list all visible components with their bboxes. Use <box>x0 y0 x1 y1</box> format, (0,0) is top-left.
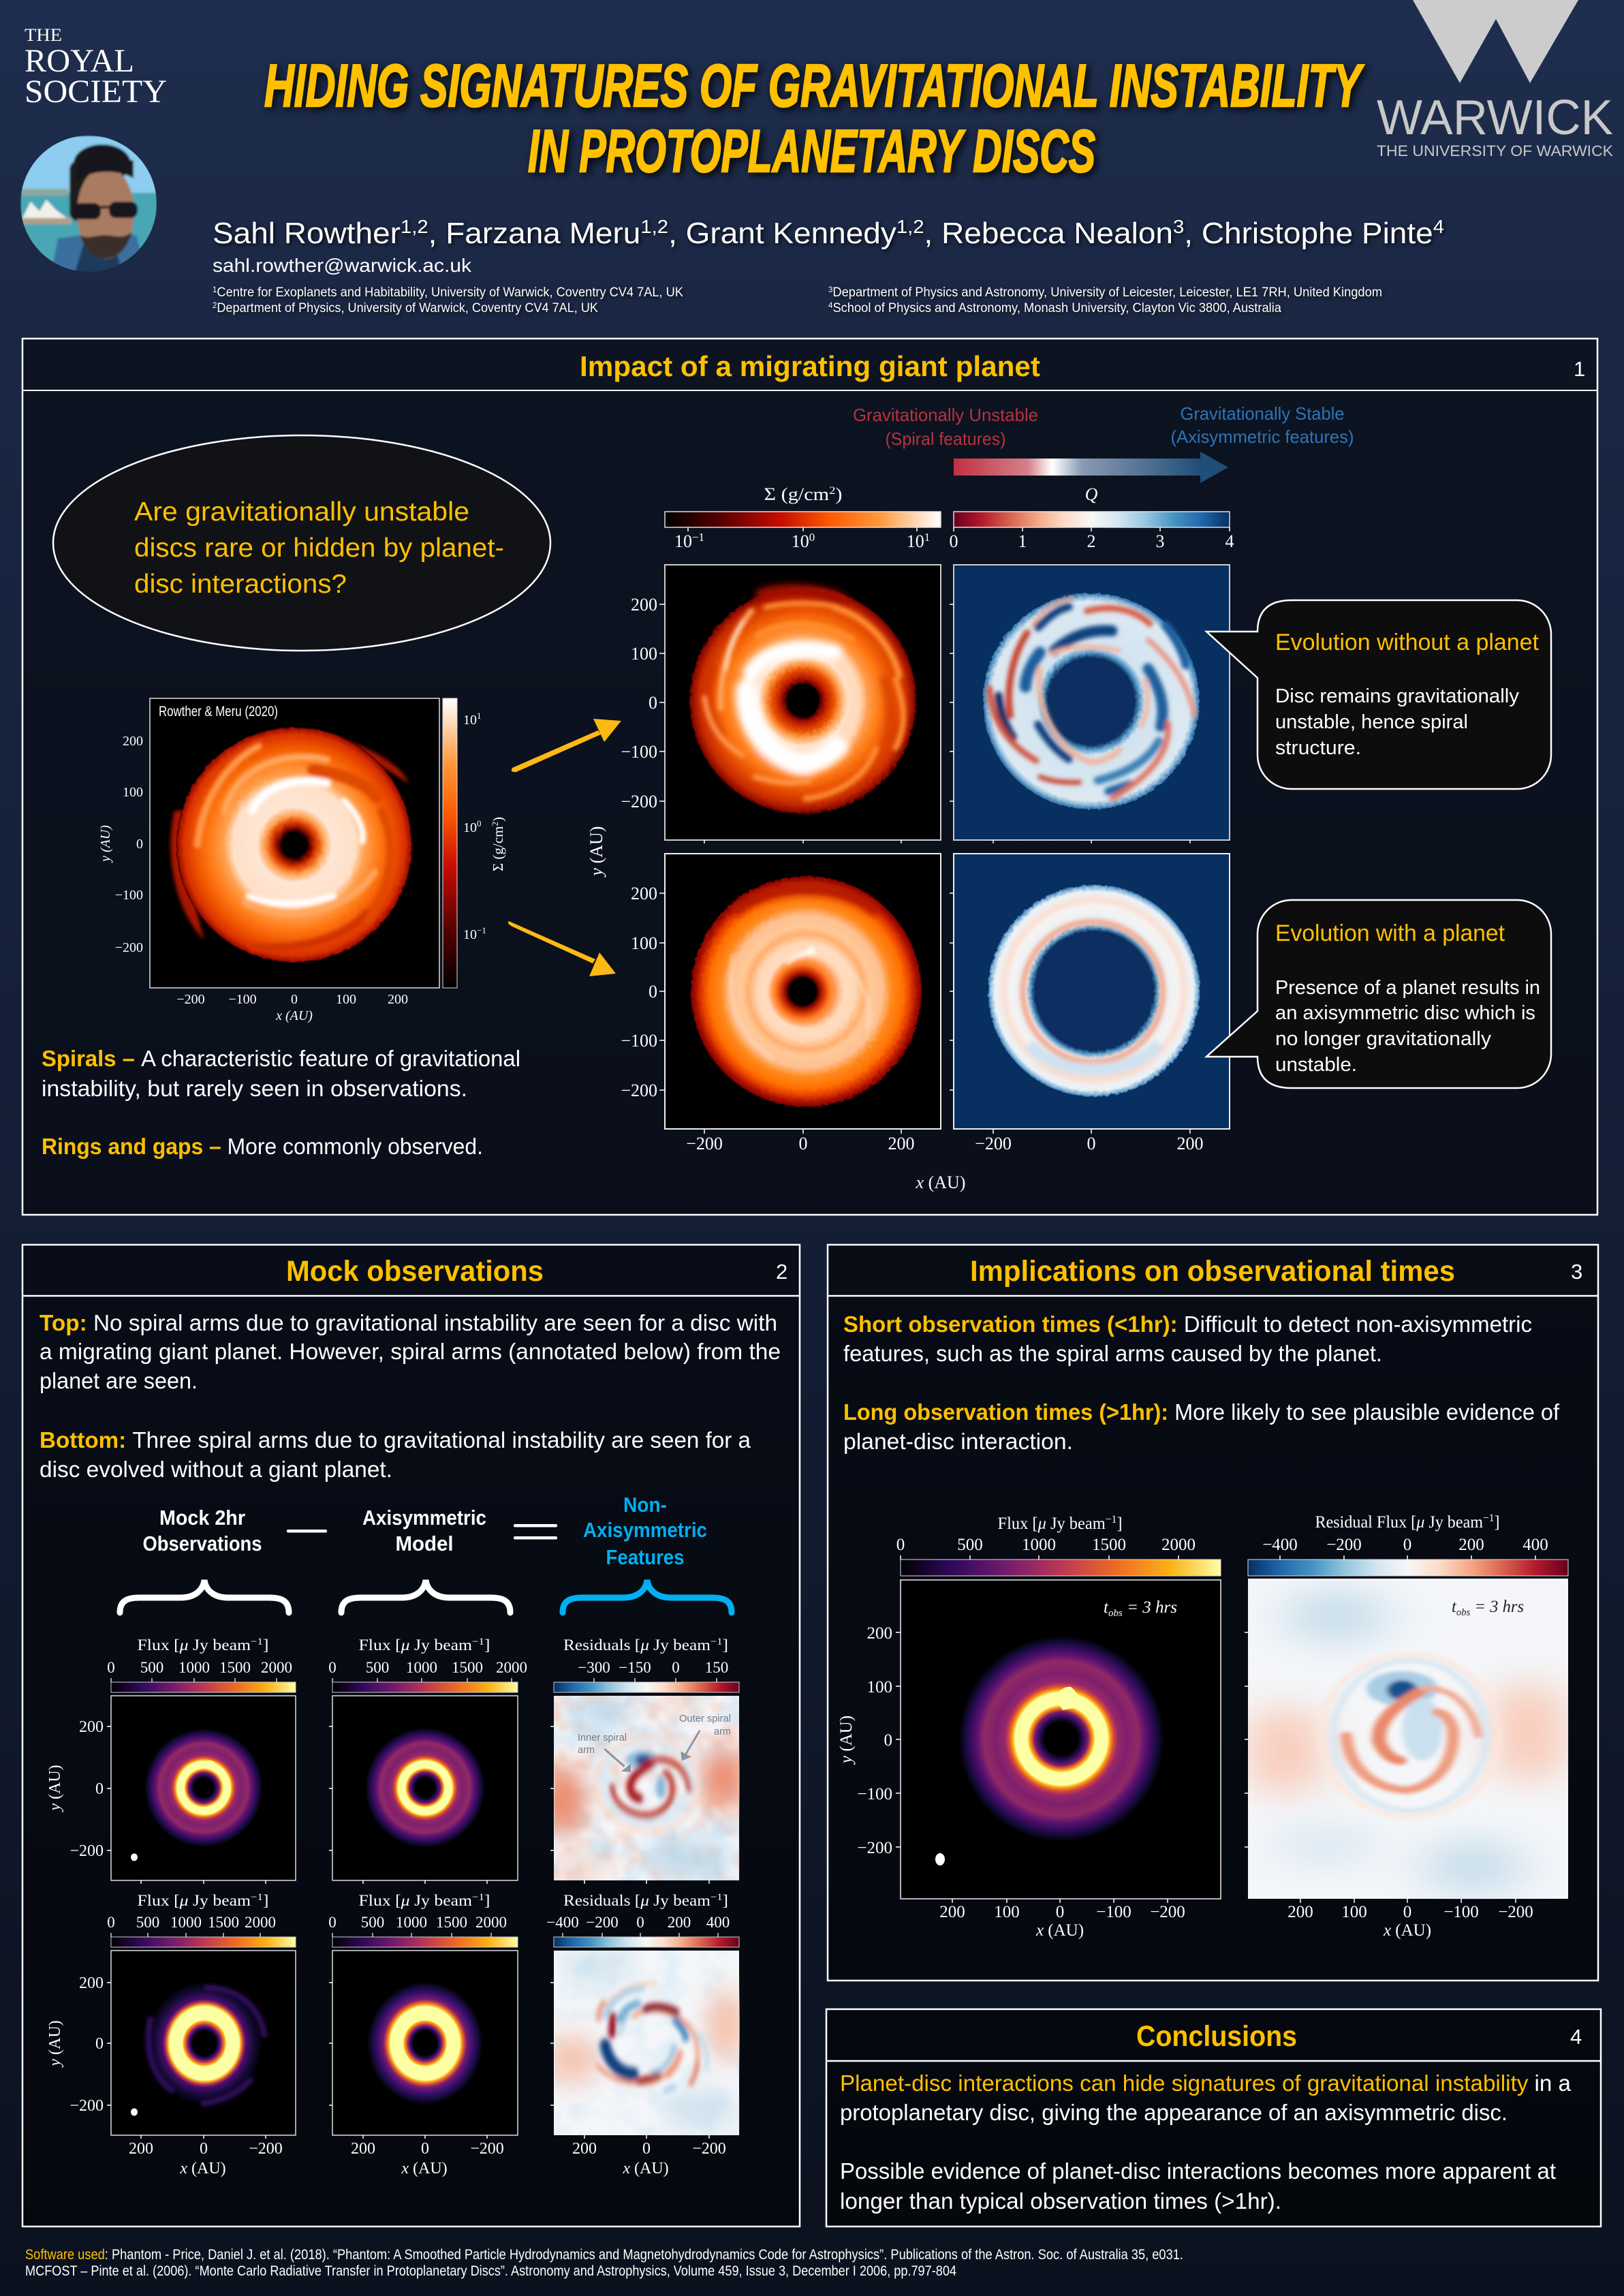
affiliations <box>213 285 1382 315</box>
plot titles and colorbars row 2: 1500 <box>208 1914 239 1931</box>
heading: panel 3: Implications on observational times <box>970 1255 1455 1288</box>
affiliations: 1 <box>213 285 217 294</box>
axis ticks and labels for density and Q maps: −200 <box>621 1081 657 1100</box>
axis ticks and labels for density and Q maps: 200 <box>1177 1134 1203 1153</box>
plot titles and colorbars row 1: 1000 <box>406 1659 437 1676</box>
title: IN PROTOPLANETARY DISCS <box>528 117 1095 185</box>
chart: flux at three hours: t <box>1104 1598 1108 1617</box>
axis ticks and labels for three hour plots: 0 <box>884 1731 892 1750</box>
gradient arrow legend: unstable to stable: Gravitationally Stable <box>1180 403 1345 424</box>
plot titles and colorbars row 2: 500 <box>361 1914 384 1931</box>
plot titles and colorbars row 1: −300 <box>578 1659 610 1676</box>
authors: , Rebecca Nealon <box>924 217 1173 250</box>
plot titles and colorbars row 1: ] <box>723 1636 728 1654</box>
colorbar: Q: 1 <box>1018 531 1027 551</box>
axis labels: 100 <box>123 785 143 800</box>
chart: flux at three hours: ] <box>1116 1515 1123 1533</box>
plot titles and colorbars row 1: −1 <box>251 1636 263 1647</box>
axis ticks and labels for density and Q maps: 100 <box>631 644 657 664</box>
text block: spirals and rings: Rings and gaps – More commonly observed. <box>42 1134 483 1159</box>
plot titles and colorbars row 1 <box>107 1636 739 1692</box>
colorbar: sigma: −1 <box>692 531 704 544</box>
colorbar: surface density: 10 <box>463 927 477 942</box>
colorbar: Q <box>950 484 1234 551</box>
axis ticks and labels for density and Q maps: −200 <box>621 792 657 811</box>
axis ticks and labels for mock observation grid: −200 <box>470 2140 504 2158</box>
colorbar: sigma: 0 <box>809 531 815 544</box>
gradient arrow legend: unstable to stable: (Spiral features) <box>886 429 1005 449</box>
plot titles and colorbars row 2: Residuals [ μ Jy beam <box>563 1892 705 1909</box>
heading: panel 1: Impact of a migrating giant planet <box>580 350 1040 382</box>
chart: flux at three hours: 2000 <box>1161 1536 1196 1554</box>
axis ticks and labels for density and Q maps: 200 <box>631 884 657 903</box>
plot titles and colorbars row 2: −200 <box>586 1914 619 1931</box>
text block: spirals and rings: Spirals – A characteristic feature of gravitational <box>42 1046 520 1071</box>
authors <box>213 216 1444 250</box>
text block: conclusions: longer than typical observation times (>1hr). <box>840 2188 1281 2214</box>
equation header: observations minus model equals features: Non- <box>623 1493 667 1517</box>
authors: Sahl Rowther <box>213 217 392 250</box>
panel number 2: 2 <box>776 1260 787 1284</box>
plot titles and colorbars row 2: ] <box>723 1892 728 1909</box>
chart: Rowther and Meru surface density map <box>98 698 506 1023</box>
axis ticks and labels for three hour plots: x (AU) <box>1383 1921 1431 1940</box>
axis labels: x (AU) <box>275 1008 313 1023</box>
text block: top and bottom explanation: a migrating giant planet. However, spiral arms (annotated below) from the <box>40 1339 781 1364</box>
authors: 1,2 <box>401 216 428 237</box>
axis ticks and labels for density and Q maps: −200 <box>975 1134 1012 1153</box>
plot titles and colorbars row 2 <box>107 1892 739 1947</box>
colorbar: surface density: −1 <box>477 925 486 935</box>
axis ticks and labels for density and Q maps: 0 <box>798 1134 808 1153</box>
axis ticks and labels for density and Q maps <box>587 595 1203 1192</box>
chart: flux at three hours: 0 <box>896 1536 905 1554</box>
arrow: inner spiral arm <box>604 1749 631 1772</box>
chart: flux at three hours <box>896 1514 1221 1899</box>
axis ticks and labels for mock observation grid: −200 <box>69 1842 104 1860</box>
affiliations: Centre for Exoplanets and Habitability, University of Warwick, Coventry CV4 7AL, UK <box>217 285 683 300</box>
text block: top and bottom explanation <box>40 1310 781 1482</box>
plot titles and colorbars row 1: 0 <box>672 1659 680 1676</box>
plot titles and colorbars row 2: 500 <box>136 1914 159 1931</box>
plot titles and colorbars row 2: 2000 <box>475 1914 507 1931</box>
authors: 3 <box>1173 216 1184 237</box>
plot titles and colorbars row 2: 1500 <box>436 1914 467 1931</box>
colorbar: surface density <box>443 698 506 988</box>
axis ticks and labels for mock observation grid: 200 <box>351 2140 375 2158</box>
chart: flux at three hours: = 3 hrs <box>1123 1598 1177 1617</box>
logo: University of Warwick: WARWICK <box>1377 91 1613 145</box>
axis labels: −100 <box>228 992 257 1007</box>
text block: observation times: Short observation times (<1hr): Difficult to detect non-axisymmetric <box>843 1312 1532 1337</box>
axis ticks and labels for three hour plots: x (AU) <box>1035 1921 1084 1940</box>
equation header: observations minus model equals features <box>143 1493 707 1569</box>
callout: evolution without a planet: Evolution without a planet <box>1275 630 1540 655</box>
axis ticks and labels for density and Q maps: −200 <box>686 1134 723 1153</box>
axis labels: 100 <box>336 992 356 1007</box>
axis ticks and labels for mock observation grid: −200 <box>69 2097 104 2115</box>
axis ticks and labels for mock observation grid: 0 <box>95 2035 104 2053</box>
callout: research question ellipse: discs rare or hidden by planet- <box>134 533 504 563</box>
chart: residual flux at three hours: −400 <box>1262 1536 1298 1554</box>
colorbar: surface density: 10 <box>463 820 477 835</box>
affiliations: School of Physics and Astronomy, Monash University, Clayton Vic 3800, Australia <box>832 301 1281 315</box>
logo: The Royal Society: ROYAL <box>25 43 134 79</box>
equation header: observations minus model equals features: Model <box>395 1532 454 1555</box>
plot titles and colorbars row 1: Residuals [ μ Jy beam <box>563 1636 705 1654</box>
axis labels: −200 <box>176 992 205 1007</box>
axis ticks and labels for three hour plots: 100 <box>1341 1903 1367 1921</box>
author photo <box>20 136 157 273</box>
axis ticks and labels for three hour plots: 100 <box>994 1903 1020 1921</box>
plot titles and colorbars row 1: −1 <box>710 1636 723 1647</box>
arrow: to evolution with a planet <box>508 921 616 976</box>
plot titles and colorbars row 2: 2000 <box>245 1914 276 1931</box>
axis ticks and labels for mock observation grid: 0 <box>200 2140 208 2158</box>
panel number 4: 4 <box>1570 2025 1582 2049</box>
chart: residuals without planet <box>545 1951 747 2135</box>
chart: residual flux at three hours <box>1248 1512 1568 1899</box>
authors: , Christophe Pinte <box>1184 217 1433 250</box>
axis ticks and labels for three hour plots: −200 <box>1150 1903 1185 1921</box>
logo: The Royal Society <box>25 25 167 110</box>
axis ticks and labels for three hour plots: −200 <box>1498 1903 1533 1921</box>
colorbar: sigma: 10 <box>907 531 924 551</box>
colorbar: sigma: 10 <box>792 531 809 551</box>
chart: flux at three hours: 1000 <box>1022 1536 1056 1554</box>
callout: evolution with a planet <box>1206 900 1551 1088</box>
chart: flux at three hours: 1500 <box>1092 1536 1126 1554</box>
axis ticks and labels for three hour plots: −100 <box>1443 1903 1479 1921</box>
plot titles and colorbars row 2: 1000 <box>170 1914 202 1931</box>
affiliations: Department of Physics and Astronomy, University of Leicester, Leicester, LE1 7RH, United Kingdom <box>832 285 1382 300</box>
chart: mock observation without planet <box>111 1951 296 2135</box>
axis ticks and labels for density and Q maps: 200 <box>631 595 657 615</box>
axis ticks and labels for density and Q maps: x (AU) <box>916 1173 965 1192</box>
callout: evolution with a planet: no longer gravitationally <box>1275 1028 1492 1050</box>
affiliations: 4 <box>828 300 833 310</box>
braces <box>120 1580 732 1613</box>
plot titles and colorbars row 1: 1500 <box>219 1659 251 1676</box>
text block: conclusions: protoplanetary disc, giving the appearance of an axisymmetric disc. <box>840 2100 1508 2125</box>
references footer: MCFOST – Pinte et al. (2006). “Monte Carlo Radiative Transfer in Protoplanetary Discs”. Astronomy and Astrophysics, Volume 459, Issue 3, December I 2006, pp.797-804 <box>25 2263 956 2279</box>
plot titles and colorbars row 2: ] <box>484 1892 490 1909</box>
callout: evolution with a planet: unstable. <box>1275 1054 1357 1076</box>
axis ticks and labels for three hour plots: 200 <box>866 1624 892 1643</box>
plot titles and colorbars row 1: Flux [ μ Jy beam <box>358 1636 465 1654</box>
axis ticks and labels for mock observation grid: 200 <box>129 2140 153 2158</box>
callout: evolution without a planet: structure. <box>1275 737 1361 759</box>
arrow: outer spiral arm <box>681 1731 700 1760</box>
plot label: Rowther & Meru (2020) <box>159 704 278 719</box>
plot titles and colorbars row 2: −1 <box>251 1892 263 1903</box>
chart: residual flux at three hours: = 3 hrs <box>1470 1598 1524 1616</box>
axis ticks and labels for three hour plots: 200 <box>1287 1903 1313 1921</box>
gradient arrow legend: unstable to stable: (Axisymmetric features) <box>1170 426 1354 447</box>
chart: residual flux at three hours: 0 <box>1403 1536 1411 1554</box>
text block: observation times: planet-disc interaction. <box>843 1429 1073 1454</box>
text block: observation times <box>843 1312 1560 1454</box>
equation header: observations minus model equals features: Axisymmetric <box>362 1506 486 1530</box>
chart: sigma with planet <box>665 854 941 1129</box>
axis labels: 0 <box>291 992 298 1007</box>
plot titles and colorbars row 2: 0 <box>328 1914 337 1931</box>
references footer <box>25 2247 1183 2279</box>
axis labels: −200 <box>115 940 143 955</box>
axis ticks and labels for mock observation grid: 0 <box>642 2140 651 2158</box>
axis ticks and labels for three hour plots: 0 <box>1403 1903 1411 1921</box>
axis ticks and labels for mock observation grid: 200 <box>79 1718 104 1736</box>
plot titles and colorbars row 1: 2000 <box>496 1659 527 1676</box>
colorbar: sigma: 2 <box>829 485 835 497</box>
callout: research question ellipse: disc interactions? <box>134 570 347 599</box>
chart: residuals with planet: Outer spiral <box>679 1713 731 1724</box>
axis ticks and labels for density and Q maps: 0 <box>649 982 657 1002</box>
plot titles and colorbars row 2: 0 <box>636 1914 644 1931</box>
callout: evolution with a planet: Presence of a planet results in <box>1275 977 1540 999</box>
axis ticks and labels for three hour plots <box>837 1624 1533 1940</box>
axis ticks and labels for mock observation grid: 0 <box>95 1780 104 1798</box>
chart: axisymmetric model with planet <box>332 1696 518 1880</box>
callout: evolution without a planet <box>1206 600 1551 789</box>
gradient arrow legend: unstable to stable: Gravitationally Unstable <box>853 405 1038 425</box>
axis ticks and labels for density and Q maps: 0 <box>1087 1134 1095 1153</box>
chart: residual flux at three hours: t <box>1452 1598 1456 1616</box>
authors: 4 <box>1433 216 1444 237</box>
plot titles and colorbars row 1: 500 <box>366 1659 389 1676</box>
text block: spirals and rings: instability, but rarely seen in observations. <box>42 1076 467 1101</box>
affiliations: 3 <box>828 285 833 294</box>
panel: impact of a migrating giant planet <box>22 339 1597 1215</box>
axis labels: 0 <box>136 837 143 852</box>
chart: residual flux at three hours: 400 <box>1522 1536 1548 1554</box>
plot titles and colorbars row 2: 400 <box>706 1914 730 1931</box>
text block: top and bottom explanation: Top: No spiral arms due to gravitational instability are seen for a disc with <box>40 1310 777 1335</box>
plot titles and colorbars row 1: 1000 <box>178 1659 210 1676</box>
callout: evolution with a planet: an axisymmetric disc which is <box>1275 1002 1535 1024</box>
chart: flux at three hours: −1 <box>1106 1514 1116 1525</box>
axis ticks and labels for mock observation grid: y (AU) <box>46 2020 64 2068</box>
chart: residuals with planet: Inner spiral <box>578 1732 627 1743</box>
authors: , Farzana Meru <box>428 217 640 250</box>
chart: flux at three hours: Flux [μ Jy beam <box>997 1515 1107 1533</box>
chart: mock observation with planet <box>111 1696 296 1880</box>
colorbar: sigma: 1 <box>924 531 930 544</box>
colorbar: sigma: Σ (g/cm <box>764 484 820 504</box>
colorbar: sigma: 10 <box>674 531 692 551</box>
colorbar: Q: 4 <box>1225 531 1234 551</box>
axis ticks and labels for mock observation grid: y (AU) <box>46 1765 64 1812</box>
axis ticks and labels for density and Q maps: 0 <box>649 693 657 713</box>
text block: top and bottom explanation: Bottom: Three spiral arms due to gravitational instability are seen for a <box>40 1427 751 1453</box>
text block: spirals and rings <box>42 1046 520 1159</box>
callout: evolution with a planet: Evolution with a planet <box>1275 920 1505 946</box>
plot titles and colorbars row 2: 1000 <box>396 1914 427 1931</box>
chart: residual flux at three hours: ] <box>1494 1513 1500 1532</box>
axis ticks and labels for three hour plots: 100 <box>866 1678 892 1696</box>
email: sahl.rowther@warwick.ac.uk <box>213 255 472 276</box>
callout: research question ellipse <box>53 435 550 651</box>
gradient arrow legend: unstable to stable <box>853 403 1354 483</box>
plot titles and colorbars row 1: ] <box>263 1636 268 1654</box>
axis ticks and labels for mock observation grid: 0 <box>421 2140 429 2158</box>
plot titles and colorbars row 2: 200 <box>668 1914 691 1931</box>
axis ticks and labels for mock observation grid: x (AU) <box>401 2160 448 2177</box>
axis labels: −100 <box>115 888 143 903</box>
plot titles and colorbars row 1: 1500 <box>452 1659 483 1676</box>
affiliations: Department of Physics, University of Warwick, Coventry CV4 7AL, UK <box>217 301 598 315</box>
axis labels <box>98 734 408 1023</box>
colorbar: Q: Q <box>1085 484 1098 504</box>
panel: implications on observational times <box>828 1245 1598 1981</box>
chart: Q with planet <box>954 854 1230 1129</box>
axis ticks and labels for density and Q maps: 200 <box>888 1134 914 1153</box>
axis ticks and labels for three hour plots: y (AU) <box>837 1716 856 1765</box>
axis ticks and labels for mock observation grid: −200 <box>692 2140 726 2158</box>
axis ticks and labels for three hour plots: −100 <box>1096 1903 1131 1921</box>
plot titles and colorbars row 1: 0 <box>107 1659 115 1676</box>
colorbar: surface density: 2 <box>490 822 500 826</box>
authors: , Grant Kennedy <box>668 217 896 250</box>
affiliations: 2 <box>213 300 217 310</box>
references footer: Software used: Phantom - Price, Daniel J. et al. (2018). “Phantom: A Smoothed Particle Hydrodynamics and Magnetohydrodynamics Code for Astrophysics”. Publications of the Astron. Soc. of Australia 35, e031. <box>25 2247 1183 2263</box>
colorbar: surface density: ) <box>490 817 506 822</box>
colorbar: sigma <box>665 484 941 551</box>
authors: 1,2 <box>896 216 924 237</box>
text block: top and bottom explanation: disc evolved without a giant planet. <box>40 1457 392 1482</box>
plot titles and colorbars row 2: ] <box>263 1892 268 1909</box>
axis ticks and labels for three hour plots: 200 <box>939 1903 965 1921</box>
chart: residual flux at three hours: Residual Flux [μ Jy beam <box>1315 1513 1485 1532</box>
colorbar: Q: 0 <box>950 531 958 551</box>
chart: axisymmetric model without planet <box>332 1951 518 2135</box>
plot titles and colorbars row 1: ] <box>484 1636 490 1654</box>
panel number 3: 3 <box>1571 1260 1582 1284</box>
plot titles and colorbars row 2: 0 <box>107 1914 115 1931</box>
callout: evolution without a planet: Disc remains gravitationally <box>1275 685 1519 707</box>
text block: observation times: Long observation times (>1hr): More likely to see plausible evidence of <box>843 1399 1560 1425</box>
colorbar: surface density: 1 <box>477 711 481 721</box>
plot titles and colorbars row 2: Flux [ μ Jy beam <box>358 1892 465 1909</box>
axis ticks and labels for density and Q maps: −100 <box>621 742 657 762</box>
text block: top and bottom explanation: planet are seen. <box>40 1368 198 1393</box>
colorbar: surface density: 0 <box>477 818 481 828</box>
axis ticks and labels for mock observation grid: 200 <box>79 1974 104 1992</box>
panel: mock observations <box>22 1245 800 2227</box>
equation header: observations minus model equals features: Observations <box>143 1532 262 1555</box>
chart: residuals with planet: arm <box>714 1726 731 1737</box>
chart: residual flux at three hours: obs <box>1456 1607 1470 1618</box>
equation header: observations minus model equals features: Axisymmetric <box>583 1518 707 1542</box>
plot titles and colorbars row 1: 500 <box>140 1659 163 1676</box>
chart: flux at three hours: 500 <box>957 1536 983 1554</box>
axis ticks and labels for mock observation grid: 200 <box>572 2140 597 2158</box>
panel: conclusions <box>826 2009 1601 2227</box>
heading: panel 4: Conclusions <box>1136 2020 1297 2053</box>
axis labels: y (AU) <box>98 825 113 863</box>
text block: observation times: features, such as the spiral arms caused by the planet. <box>843 1341 1382 1366</box>
chart: residual flux at three hours: 200 <box>1458 1536 1484 1554</box>
plot titles and colorbars row 1: 150 <box>705 1659 728 1676</box>
equation header: observations minus model equals features: Mock 2hr <box>159 1506 245 1530</box>
axis ticks and labels for mock observation grid <box>46 1718 726 2177</box>
equation header: observations minus model equals features: Features <box>606 1545 684 1569</box>
logo: The Royal Society: THE <box>25 25 62 45</box>
logo: University of Warwick <box>1377 0 1613 159</box>
callout: evolution without a planet: unstable, hence spiral <box>1275 711 1468 733</box>
plot titles and colorbars row 1: −1 <box>472 1636 484 1647</box>
chart: residuals with planet <box>540 1696 747 1880</box>
title <box>264 52 1364 185</box>
panel number 1: 1 <box>1574 357 1585 381</box>
axis labels: 200 <box>123 734 143 749</box>
axis ticks and labels for three hour plots: 0 <box>1056 1903 1064 1921</box>
plot titles and colorbars row 1: 0 <box>328 1659 337 1676</box>
text block: conclusions: Planet-disc interactions can hide signatures of gravitational instability in a <box>840 2070 1572 2096</box>
axis labels: 200 <box>388 992 408 1007</box>
chart: Q without planet <box>954 565 1230 840</box>
axis ticks and labels for mock observation grid: x (AU) <box>179 2160 226 2177</box>
logo: The Royal Society: SOCIETY <box>25 74 167 110</box>
text block: conclusions <box>840 2070 1572 2214</box>
chart: residual flux at three hours: −200 <box>1326 1536 1362 1554</box>
chart: residuals with planet: arm <box>578 1744 595 1756</box>
axis ticks and labels for density and Q maps: y (AU) <box>587 826 606 878</box>
colorbar: sigma: ) <box>835 484 842 504</box>
axis ticks and labels for three hour plots: −200 <box>857 1839 892 1857</box>
plot titles and colorbars row 2: −400 <box>546 1914 579 1931</box>
axis ticks and labels for three hour plots: −100 <box>857 1785 892 1803</box>
plot titles and colorbars row 2: Flux [ μ Jy beam <box>138 1892 244 1909</box>
colorbar: surface density: 10 <box>463 713 477 728</box>
plot titles and colorbars row 1: 2000 <box>261 1659 292 1676</box>
callout: research question ellipse: Are gravitationally unstable <box>134 497 469 527</box>
logo: University of Warwick: THE UNIVERSITY OF WARWICK <box>1377 142 1613 159</box>
colorbar: surface density: Σ (g/cm <box>490 826 506 871</box>
heading: panel 2: Mock observations <box>286 1255 544 1288</box>
plot titles and colorbars row 2: −1 <box>710 1892 723 1903</box>
chart: flux at three hours: obs <box>1108 1608 1123 1619</box>
axis ticks and labels for mock observation grid: −200 <box>249 2140 283 2158</box>
plot titles and colorbars row 1: −150 <box>619 1659 651 1676</box>
axis ticks and labels for mock observation grid: x (AU) <box>622 2160 669 2177</box>
axis ticks and labels for density and Q maps: −100 <box>621 1031 657 1051</box>
text block: conclusions: Possible evidence of planet-disc interactions becomes more apparent at <box>840 2158 1556 2184</box>
axis ticks and labels for density and Q maps: 100 <box>631 933 657 953</box>
authors: 1,2 <box>640 216 668 237</box>
colorbar: Q: 3 <box>1155 531 1165 551</box>
colorbar: Q: 2 <box>1087 531 1095 551</box>
arrow: to evolution without a planet <box>512 719 621 772</box>
chart: sigma without planet <box>665 565 941 840</box>
plot titles and colorbars row 1: Flux [ μ Jy beam <box>138 1636 244 1654</box>
chart: residual flux at three hours: −1 <box>1483 1512 1494 1524</box>
plot titles and colorbars row 2: −1 <box>472 1892 484 1903</box>
